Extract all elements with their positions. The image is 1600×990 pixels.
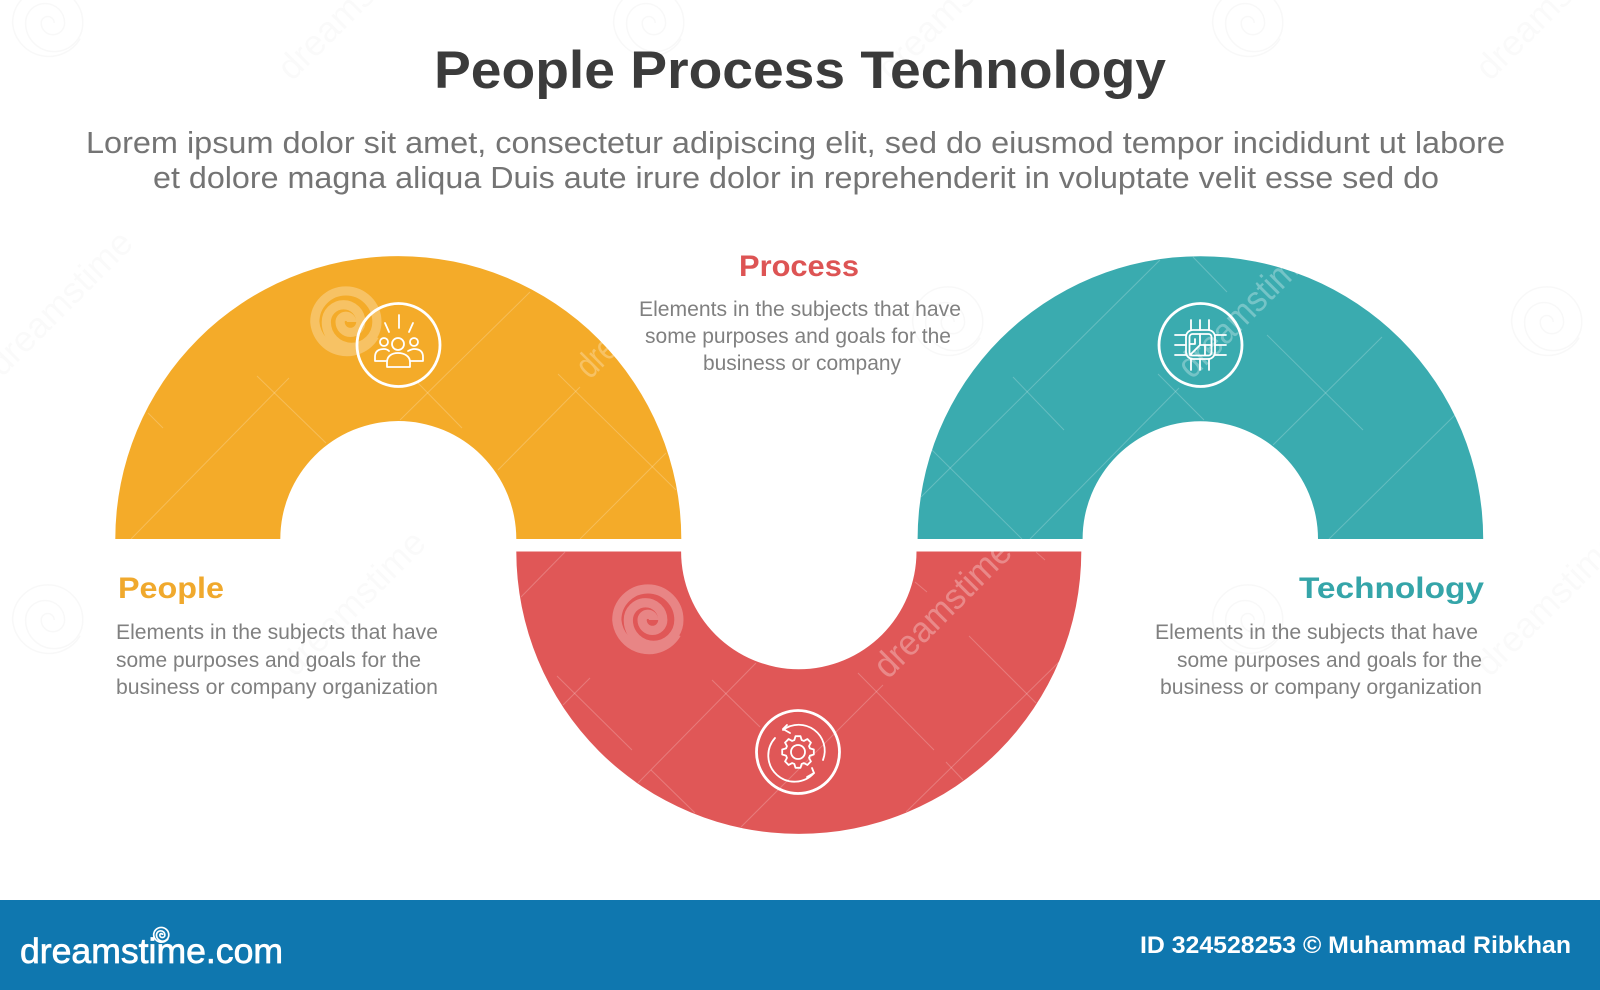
description: people: some purposes and goals for the: [116, 648, 421, 672]
description: process: some purposes and goals for the: [645, 324, 951, 348]
icon: microchip: [1159, 304, 1242, 386]
description: technology: some purposes and goals for the: [1177, 648, 1482, 672]
panel: process arch: [516, 552, 1081, 834]
watermark: wordmark on people arch: dreamstime: [567, 251, 702, 386]
icon: people: [357, 304, 440, 386]
subtitle: Lorem ipsum dolor sit amet, consectetur adipiscing elit, sed do eiusmod tempor incididunt ut labore: [86, 126, 1505, 160]
heading: technology: Technology: [1299, 572, 1484, 605]
text block: technology: [1155, 572, 1484, 699]
title: People Process Technology: [434, 41, 1167, 100]
description: people: business or company organization: [116, 675, 438, 699]
watermark: faint spirals and wordmarks on the white background: [0, 0, 1600, 684]
text block: process: [639, 250, 961, 375]
icon: gear with cycle arrows: [756, 710, 840, 794]
watermark: diagonal lines over arches: [131, 257, 1455, 827]
footer logo spiral: [154, 927, 169, 942]
description: process: business or company: [703, 351, 901, 375]
heading: process: Process: [739, 250, 859, 283]
subtitle: [86, 126, 1505, 195]
heading: people: People: [118, 572, 224, 605]
description: people: [116, 620, 438, 699]
footer band: [0, 900, 1600, 990]
watermark: spiral on people arch: [315, 291, 377, 352]
watermark: wordmark on technology arch: dreamstime: [1169, 235, 1319, 386]
description: process: [639, 297, 961, 375]
description: technology: business or company organization: [1160, 675, 1482, 699]
watermark: spiral on process arch: [617, 589, 679, 650]
subtitle: et dolore magna aliqua Duis aute irure dolor in reprehenderit in voluptate velit esse sed do: [153, 161, 1439, 195]
watermark: wordmark on process arch: dreamstime: [865, 531, 1020, 686]
watermark: faint spirals and wordmarks on the white background: dreamstime: [272, 522, 434, 684]
panel: people arch: [115, 256, 681, 539]
description: technology: Elements in the subjects that have: [1155, 620, 1478, 644]
footer logo wordmark: dreamstime.com: [20, 932, 283, 971]
description: people: Elements in the subjects that have: [116, 620, 438, 644]
description: process: Elements in the subjects that have: [639, 297, 961, 321]
footer credit: ID 324528253 © Muhammad Ribkhan: [1140, 932, 1571, 959]
description: technology: [1155, 620, 1482, 699]
panel: technology arch: [918, 256, 1483, 539]
text block: people: [116, 572, 438, 699]
